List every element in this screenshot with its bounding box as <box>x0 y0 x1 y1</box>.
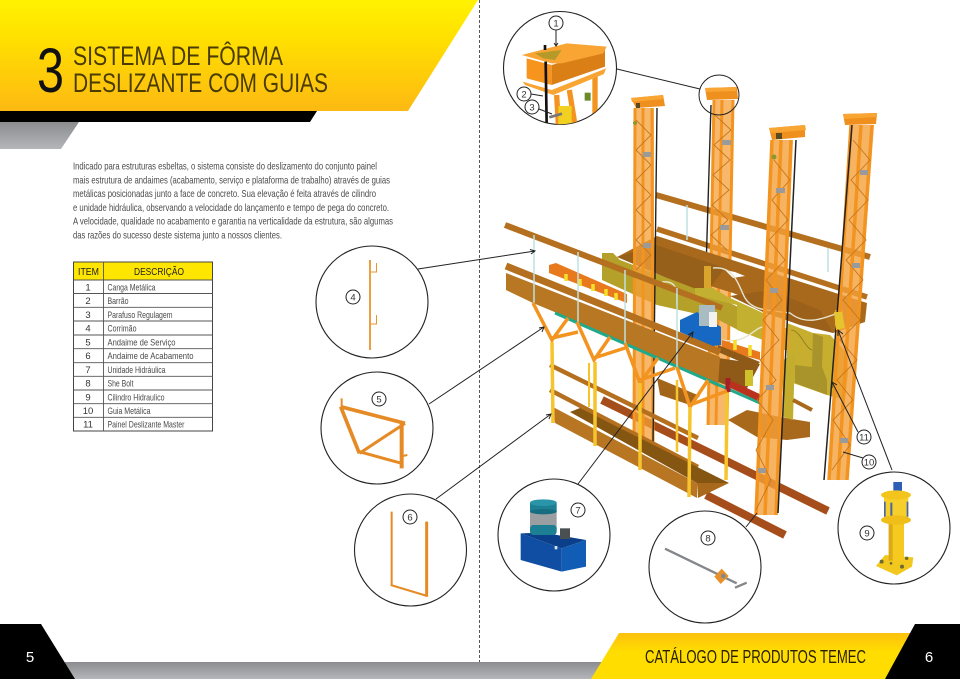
title: 3 <box>37 36 64 106</box>
detail circle: handrail 4: 4 <box>350 292 356 304</box>
arrow 1 <box>554 30 558 46</box>
detail circle: hydraulic unit 7 <box>498 479 610 591</box>
parts table: 3 <box>85 310 91 321</box>
detail circle: finishing scaffold 6 <box>354 494 466 606</box>
arrow 2 <box>531 94 543 96</box>
arrow 11 <box>832 382 858 432</box>
detail circle: service scaffold 5: 5 <box>376 394 382 406</box>
intro paragraph: mais estrutura de andaimes (acabamento, serviço e plataforma de trabalho) através de guias <box>73 174 390 186</box>
parts table <box>73 262 213 431</box>
intro paragraph: Indicado para estruturas esbeltas, o sistema consiste do deslizamento do conjunto painel <box>73 160 377 172</box>
parts table: Corrimão <box>108 324 136 334</box>
red frame <box>726 378 730 392</box>
arrow 5 <box>429 327 544 404</box>
rear wood wall and deck <box>617 236 867 333</box>
intro paragraph: A velocidade, qualidade no acabamento e garantia na verticalidade da estrutura, são algumas <box>73 216 393 228</box>
parts table: 2 <box>85 296 91 307</box>
footer left <box>0 624 605 679</box>
intro paragraph: e unidade hidráulica, observando a velocidade do lançamento e tempo de pega do concreto. <box>73 202 389 214</box>
hydraulic unit in place <box>680 305 721 346</box>
label 1 <box>549 16 563 30</box>
footer right <box>591 624 960 679</box>
parts table: 8 <box>85 378 91 390</box>
arrow 9 <box>838 330 892 470</box>
inner work platform <box>549 263 760 386</box>
detail circle: items 1 2 3 <box>504 12 616 125</box>
parts table: 4 <box>85 324 91 334</box>
label 11: 11 <box>859 432 869 444</box>
detail circle: she bolt 8 <box>649 511 761 623</box>
service scaffold braces <box>533 303 727 407</box>
parts table: Cilindro Hidraulico <box>108 392 164 404</box>
lower wood platform <box>657 358 810 440</box>
label 3 <box>525 100 539 114</box>
label 2 <box>517 87 531 101</box>
parts table: 5 <box>85 338 91 348</box>
light blue hangers <box>534 235 677 367</box>
parts table: Guia Metálica <box>108 406 151 417</box>
detail circle: cylinder 9 <box>838 472 950 584</box>
arrow 10 <box>843 452 863 458</box>
arrow 4 <box>418 250 535 269</box>
parts table: Barrão <box>108 296 128 307</box>
parts table: ITEM <box>78 266 99 278</box>
rear hangers <box>687 205 828 272</box>
label 1: 1 <box>553 18 559 30</box>
teal strip <box>555 313 760 403</box>
parts table: Unidade Hidráulica <box>108 365 166 376</box>
back rails <box>656 195 870 297</box>
parts table: 10 <box>83 406 93 417</box>
parts table: 9 <box>85 392 91 404</box>
parts table: Canga Metálica <box>108 282 156 294</box>
footer right: 6 <box>925 649 933 666</box>
detail circle: she bolt 8: 8 <box>705 534 711 544</box>
arrow 8 <box>746 513 757 527</box>
title: DESLIZANTE COM GUIAS <box>73 68 328 98</box>
parts table: DESCRIÇÃO <box>134 265 184 278</box>
white hydraulic hoses <box>662 268 838 341</box>
label 3: 3 <box>529 102 535 114</box>
detail circle: service scaffold 5 <box>321 372 433 484</box>
parts table: 11 <box>83 420 93 430</box>
hydraulic cylinders <box>704 266 843 350</box>
title: SISTEMA DE FÔRMA <box>73 40 283 71</box>
yellow verticals <box>552 342 727 497</box>
rear tower B <box>705 87 738 425</box>
footer left: 5 <box>26 649 34 666</box>
front rails <box>505 225 722 352</box>
intro paragraph: metálicas posicionadas junto a face de concreto. Sua elevação é feita através de cilindro <box>73 188 376 200</box>
parts table: Andaime de Serviço <box>108 338 176 348</box>
parts table: Painel Deslizante Master <box>108 420 184 430</box>
finishing scaffold deck <box>553 407 729 498</box>
label 11 <box>857 430 871 444</box>
olive master panel <box>602 253 848 420</box>
intro paragraph: das razões do sucesso deste sistema junto a nossos clientes. <box>73 230 282 242</box>
label 10 <box>862 455 876 469</box>
parts table: 6 <box>85 351 91 362</box>
arrow 3 <box>539 109 552 114</box>
front towers <box>755 113 877 515</box>
parts table: She Bolt <box>108 378 134 390</box>
detail circle: cylinder 9: 9 <box>864 528 870 540</box>
footer right: CATÁLOGO DE PRODUTOS TEMEC <box>645 647 866 667</box>
callout: detail link line <box>617 69 700 89</box>
lower scaffold rails <box>550 365 698 467</box>
detail circle: finishing scaffold 6: 6 <box>407 512 413 524</box>
parts table: Andaime de Acabamento <box>108 351 194 362</box>
label 2: 2 <box>521 90 527 100</box>
callout ring on tower <box>699 75 739 115</box>
detail circle: handrail 4 <box>316 246 428 358</box>
rear tower A <box>631 95 665 445</box>
intro paragraph <box>73 160 393 242</box>
parts table: Parafuso Regulagem <box>108 310 173 321</box>
parts table: 7 <box>85 365 91 376</box>
header banner <box>0 0 478 149</box>
parts table: 1 <box>85 282 91 294</box>
label 10: 10 <box>864 458 874 468</box>
main 3D formwork drawing <box>505 87 877 535</box>
title <box>37 36 328 106</box>
detail circle: hydraulic unit 7: 7 <box>575 506 581 516</box>
arrow 6 <box>436 414 551 499</box>
front wood wall <box>506 273 720 387</box>
rear rail stub under panel <box>793 400 812 410</box>
center fold line <box>478 0 480 662</box>
arrow 7 <box>578 332 693 484</box>
brick beams <box>602 400 828 535</box>
